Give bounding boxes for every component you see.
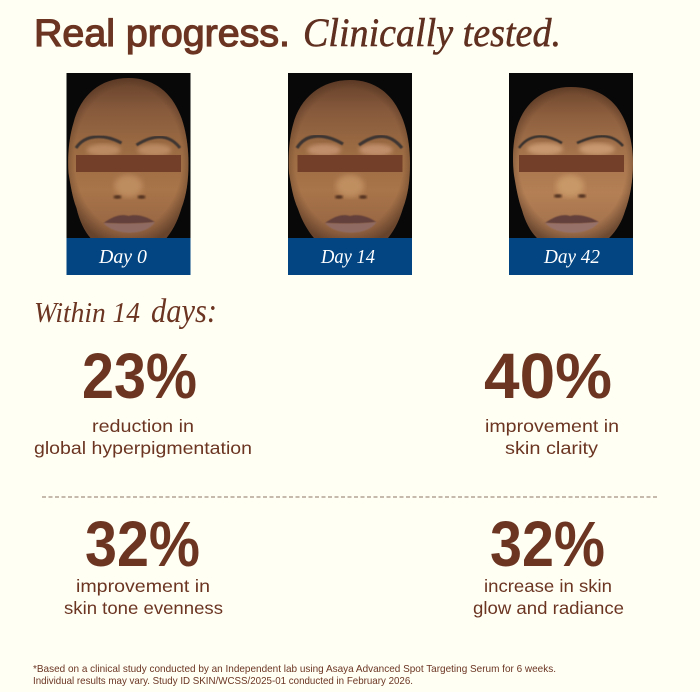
subheading: days: — [151, 293, 217, 330]
footnote: *Based on a clinical study conducted by an Independent lab using Asaya Advanced Spot Targeting Serum for 6 weeks. — [33, 663, 556, 675]
photo card: Day 0 — [66, 73, 190, 275]
title: Real progress. — [34, 13, 290, 55]
stat: 32% glow — [473, 508, 624, 618]
stat: 40%: improvement in — [485, 416, 619, 436]
title: Clinically tested. — [303, 10, 561, 55]
day banner — [509, 238, 633, 275]
day banner: Day 42 — [543, 246, 600, 268]
stat: 32% glow: increase in skin — [484, 576, 612, 596]
subheading — [34, 293, 217, 330]
censor bar — [519, 155, 624, 172]
stat: 40% — [484, 340, 619, 458]
stat: 32% skin tone: skin tone evenness — [64, 598, 223, 618]
day banner: Day 14 — [320, 246, 375, 268]
stat: 23%: global hyperpigmentation — [34, 438, 252, 458]
title — [34, 10, 561, 55]
stat: 40%: skin clarity — [505, 438, 598, 458]
footnote: Individual results may vary. Study ID SKIN/WCSS/2025-01 conducted in February 2026. — [33, 675, 413, 687]
stat: 23%: 23% — [82, 340, 197, 412]
subheading: Within 14 — [34, 298, 140, 329]
stat: 32% glow: glow and radiance — [473, 598, 624, 618]
stat: 32% skin tone — [64, 508, 223, 618]
day banner — [66, 238, 190, 275]
day banner: Day 0 — [98, 246, 147, 268]
stat: 23% — [34, 340, 252, 458]
stat: 40%: 40% — [484, 340, 612, 412]
stat: 23%: reduction in — [92, 416, 194, 436]
photo card: Day 14 — [288, 73, 412, 275]
stat: 32% skin tone: 32% — [85, 508, 200, 580]
censor bar — [298, 155, 402, 172]
censor bar — [76, 155, 181, 172]
photo card: Day 42 — [509, 73, 633, 275]
footnote — [33, 663, 556, 687]
stat: 32% skin tone: improvement in — [76, 576, 210, 596]
stat: 32% glow: 32% — [490, 508, 605, 580]
day banner — [288, 238, 412, 275]
